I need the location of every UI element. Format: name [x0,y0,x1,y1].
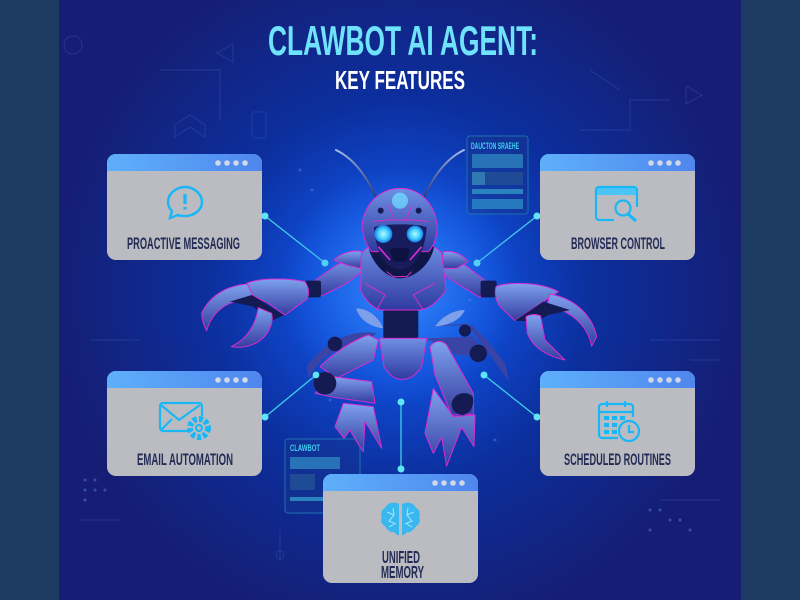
label: PROACTIVE MESSAGING [127,235,240,253]
icon: speech bubble with exclamation [168,187,202,218]
rear legs and fins [307,308,509,382]
head dome [362,188,437,252]
antennae [336,150,464,212]
label: UNIFIED [382,547,420,567]
faint background decorations [64,36,720,560]
title line 1: CLAWBOT AI AGENT: [268,17,538,64]
connector lines [262,212,540,472]
mouth jaws [378,247,422,260]
face mask [374,224,427,269]
label: EMAIL AUTOMATION [137,451,233,469]
floating panel: top right: DAUCTON SRAEHE [471,141,519,151]
title line 2: KEY FEATURES [335,65,465,95]
dotted texture [84,168,692,532]
floating panel: bottom left: CLAWBOT [290,443,320,453]
card: email automation [107,371,262,476]
waist [383,308,418,340]
right arm [440,251,597,360]
collar [368,247,434,278]
label: SCHEDULED ROUTINES [564,451,671,469]
floating panel: bottom left [285,439,360,513]
right leg [425,341,475,466]
left leg [314,335,382,452]
torso [361,243,446,310]
connector: scheduled routines [480,372,540,420]
email connector end dot [313,372,319,378]
floating panel: top right [467,136,528,214]
antenna sockets [378,208,422,214]
icon: envelope with gear [160,403,208,437]
title [268,17,538,95]
connector: unified memory [398,398,404,472]
card: proactive messaging [107,154,262,260]
card: unified memory [323,474,478,583]
icon: calendar with clock [599,401,639,441]
chest lines [365,272,435,310]
connector: browser control [474,212,540,266]
robot illustration [202,150,597,466]
card: scheduled routines [540,371,695,476]
label: MEMORY [381,562,424,582]
icon: brain [381,503,420,535]
label: BROWSER CONTROL [571,235,665,253]
connector: proactive messaging [262,212,328,266]
dome highlight [392,193,408,209]
card: browser control [540,154,695,260]
robot glow [280,165,520,405]
icon: browser with magnifier [596,187,637,221]
left arm [202,251,362,347]
label [381,547,424,582]
eyes [374,225,392,243]
connector: email automation [262,375,316,420]
helmet seams [373,205,427,222]
pelvis [379,338,427,379]
